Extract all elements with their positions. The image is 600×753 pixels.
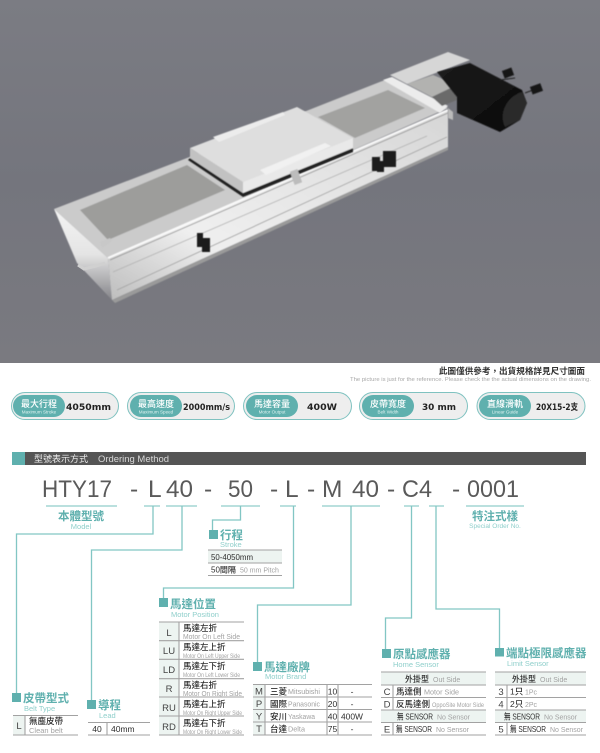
panel: motor position: Motor On Right Lower Side — [183, 730, 243, 736]
panel: limit sensor: 1只 — [510, 686, 524, 696]
panel: motor brand: Motor Brand — [265, 672, 306, 681]
model code: 0001 — [467, 476, 519, 503]
panel: motor position: Motor Position — [171, 610, 219, 619]
panel: home sensor: Motor Side — [424, 690, 459, 696]
panel: motor brand: 10 — [328, 686, 337, 696]
panel: lead: 導程 — [98, 698, 121, 712]
panel: stroke: Stroke — [220, 540, 242, 549]
panel: belt type: L — [16, 721, 22, 732]
panel: motor position: 馬達右上折 — [183, 699, 226, 709]
model code: 40 — [352, 476, 379, 503]
panel: limit sensor — [495, 646, 587, 736]
model code — [42, 476, 519, 503]
badge: motor output: 馬達容量 — [254, 398, 290, 409]
panel: limit sensor: 3 — [498, 687, 504, 698]
panel: limit sensor: Out Side — [540, 677, 567, 684]
panel: motor brand: Delta — [288, 726, 305, 734]
badge: maximum stroke: 最大行程 — [21, 398, 57, 409]
panel: belt type: Clean belt — [29, 726, 64, 735]
panel: motor position: Motor On Left Side — [183, 634, 240, 641]
panel: motor brand: 40 — [328, 712, 337, 722]
panel: motor brand: 台達 — [270, 724, 288, 734]
badge: maximum speed: 2000mm/s — [183, 403, 230, 413]
panel: stroke: 50-4050mm — [211, 553, 253, 562]
panel: motor brand: 安川 — [270, 712, 287, 722]
panel: home sensor: No Sensor — [437, 714, 471, 722]
panel: limit sensor: 外掛型 — [512, 674, 536, 684]
panel: home sensor: 外掛型 — [405, 674, 429, 684]
panel: motor position: Motor On Left Upper Side — [183, 654, 241, 660]
panel: motor brand: M — [255, 686, 263, 698]
panel: motor brand: Mitsubishi — [288, 689, 320, 696]
badge: linear guide: 直線滑軌 — [487, 398, 523, 409]
panel: home sensor: D — [384, 700, 391, 710]
model code: 50 — [228, 476, 253, 503]
panel: home sensor: 無 SENSOR — [396, 724, 432, 734]
label: special order: Special Order No. — [469, 523, 521, 530]
panel: limit sensor: No Sensor — [544, 714, 578, 722]
icon: cable connector — [78, 263, 105, 269]
panel: motor position: 馬達位置 — [170, 597, 216, 611]
panel: home sensor: 反馬達側 — [396, 699, 430, 709]
icon: sensor brackets — [197, 151, 396, 252]
section heading: ordering method — [12, 452, 586, 465]
panel: lead: Lead — [99, 711, 116, 720]
panel: motor brand: Yaskawa — [288, 714, 315, 721]
badge: maximum stroke: Maximum Stroke — [22, 410, 57, 414]
panel: motor position: Motor On Right Upper Side — [183, 711, 243, 717]
panel: home sensor: OppoSite Motor Side — [432, 703, 485, 709]
panel: home sensor: 馬達側 — [396, 686, 422, 696]
badge: motor output: Motor Output — [259, 410, 286, 414]
badge: linear guide: 20X15-2支 — [536, 401, 578, 413]
panel: motor position — [159, 597, 244, 736]
model code: - — [387, 476, 395, 503]
model code: - — [307, 476, 315, 503]
panel: limit sensor: 4 — [498, 700, 504, 710]
panel: home sensor: E — [384, 724, 390, 736]
badge: motor output — [244, 392, 352, 420]
panel: home sensor: 原點感應器 — [393, 647, 451, 661]
badge: maximum stroke: 4050mm — [66, 403, 111, 413]
panel: limit sensor: 端點極限感應器 — [506, 646, 587, 660]
badge: maximum stroke — [12, 392, 118, 420]
panel: stroke: 50間隔 — [211, 566, 236, 574]
panel: stroke: 50 mm Pitch — [240, 568, 279, 574]
label: model — [58, 509, 104, 531]
icon: end cap and rear block — [383, 52, 470, 120]
panel: motor brand: - — [351, 699, 354, 709]
badge: linear guide — [477, 392, 585, 420]
panel: motor brand: P — [256, 699, 262, 710]
badge: belt width: 30 mm — [422, 403, 456, 413]
panel: belt type: 皮帶型式 — [23, 691, 69, 705]
icon: carriage — [188, 107, 353, 197]
badge: belt width: Belt Width — [378, 410, 399, 414]
panel: lead — [87, 698, 150, 735]
model code: L — [285, 476, 299, 503]
badge: maximum speed — [128, 392, 234, 420]
panel: limit sensor: 2只 — [510, 699, 524, 709]
panel: belt type: Belt Type — [24, 704, 55, 713]
panel: motor position: 馬達左折 — [183, 623, 218, 633]
model code: - — [270, 476, 278, 503]
panel: motor position: RD — [162, 722, 176, 733]
panel: motor position: R — [166, 684, 173, 695]
badge: maximum speed: Maximum Speed — [139, 410, 174, 414]
panel: belt type: 無塵皮帶 — [29, 716, 64, 726]
icon: linear module body — [54, 78, 448, 303]
panel: home sensor: No Sensor — [436, 727, 470, 734]
connector lines — [16, 506, 524, 700]
panel: home sensor — [381, 647, 486, 736]
model code: - — [204, 476, 212, 503]
panel: limit sensor: 1Pc — [525, 690, 538, 696]
panel: motor position: 馬達右下折 — [183, 718, 226, 728]
panel: home sensor: Home Sensor — [393, 660, 439, 669]
badge: belt width: 皮帶寬度 — [370, 398, 406, 409]
label: model: 本體型號 — [58, 509, 104, 523]
panel: motor brand: 75 — [328, 724, 337, 734]
panel: motor position: Motor On Right Side — [183, 691, 242, 698]
panel: belt type — [12, 691, 78, 735]
caption: 此圖僅供參考，出貨規格詳見尺寸圖面 — [439, 365, 585, 376]
panel: motor brand: Panasonic — [288, 702, 320, 708]
caption — [350, 365, 591, 383]
panel: motor position: Motor On Left Lower Side — [183, 673, 241, 679]
panel: motor position: RU — [162, 703, 176, 714]
label: model: Model — [71, 522, 92, 531]
model code: C4 — [402, 476, 432, 503]
panel: motor brand: 國際 — [270, 699, 288, 709]
panel: motor brand: 三菱 — [270, 686, 288, 696]
badge: motor output: 400W — [307, 403, 337, 413]
section heading: ordering method: Ordering Method — [98, 454, 169, 464]
panel: motor brand: T — [256, 724, 262, 735]
panel: motor brand — [253, 660, 372, 735]
panel: motor brand: 馬達廠牌 — [264, 660, 310, 674]
panel: limit sensor: 5 — [498, 724, 504, 736]
badge: linear guide: Linear Guide — [492, 410, 519, 414]
panel: motor position: 馬達左下折 — [183, 661, 226, 671]
badge: maximum speed: 最高速度 — [138, 398, 174, 409]
model code: - — [130, 476, 138, 503]
icon: servo motor — [437, 63, 543, 132]
panel: home sensor: C — [384, 687, 391, 698]
panel: limit sensor: 無 SENSOR — [510, 724, 546, 734]
panel: home sensor: Out Side — [433, 677, 460, 684]
panel: motor brand: 400W — [341, 712, 363, 722]
panel: stroke — [208, 528, 282, 576]
model code: L — [148, 476, 162, 503]
panel: motor brand: 20 — [328, 699, 337, 709]
section heading: ordering method: 型號表示方式 — [34, 453, 88, 464]
panel: motor position: LD — [163, 665, 175, 676]
panel: lead: 40mm — [111, 724, 135, 734]
panel: motor position: L — [166, 628, 172, 639]
panel: motor position: LU — [163, 646, 175, 657]
badge: belt width — [360, 392, 468, 420]
panel: limit sensor: 無 SENSOR — [504, 712, 540, 722]
panel: limit sensor: No Sensor — [550, 727, 584, 734]
panel: motor brand: Y — [256, 712, 263, 722]
label: special order — [469, 509, 521, 530]
panel: limit sensor: 2Pc — [525, 702, 538, 709]
panel: stroke: 行程 — [220, 528, 243, 542]
panel: motor brand: - — [351, 724, 354, 734]
model code: M — [322, 476, 342, 503]
panel: motor position: 馬達右折 — [183, 680, 218, 690]
panel: lead: 40 — [92, 724, 102, 734]
panel: motor brand: - — [351, 686, 354, 696]
panel: home sensor: 無 SENSOR — [397, 712, 433, 722]
panel: motor position: 馬達左上折 — [183, 642, 226, 652]
panel: limit sensor: Limit Sensor — [507, 659, 549, 668]
model code: - — [452, 476, 460, 503]
panel: product photo — [0, 0, 600, 363]
model code: HTY17 — [42, 476, 112, 503]
caption: The picture is just for the reference. Please check the the actual dimensions on the drawing. — [350, 377, 591, 383]
model code: 40 — [166, 476, 193, 503]
label: special order: 特注式樣 — [472, 509, 518, 523]
